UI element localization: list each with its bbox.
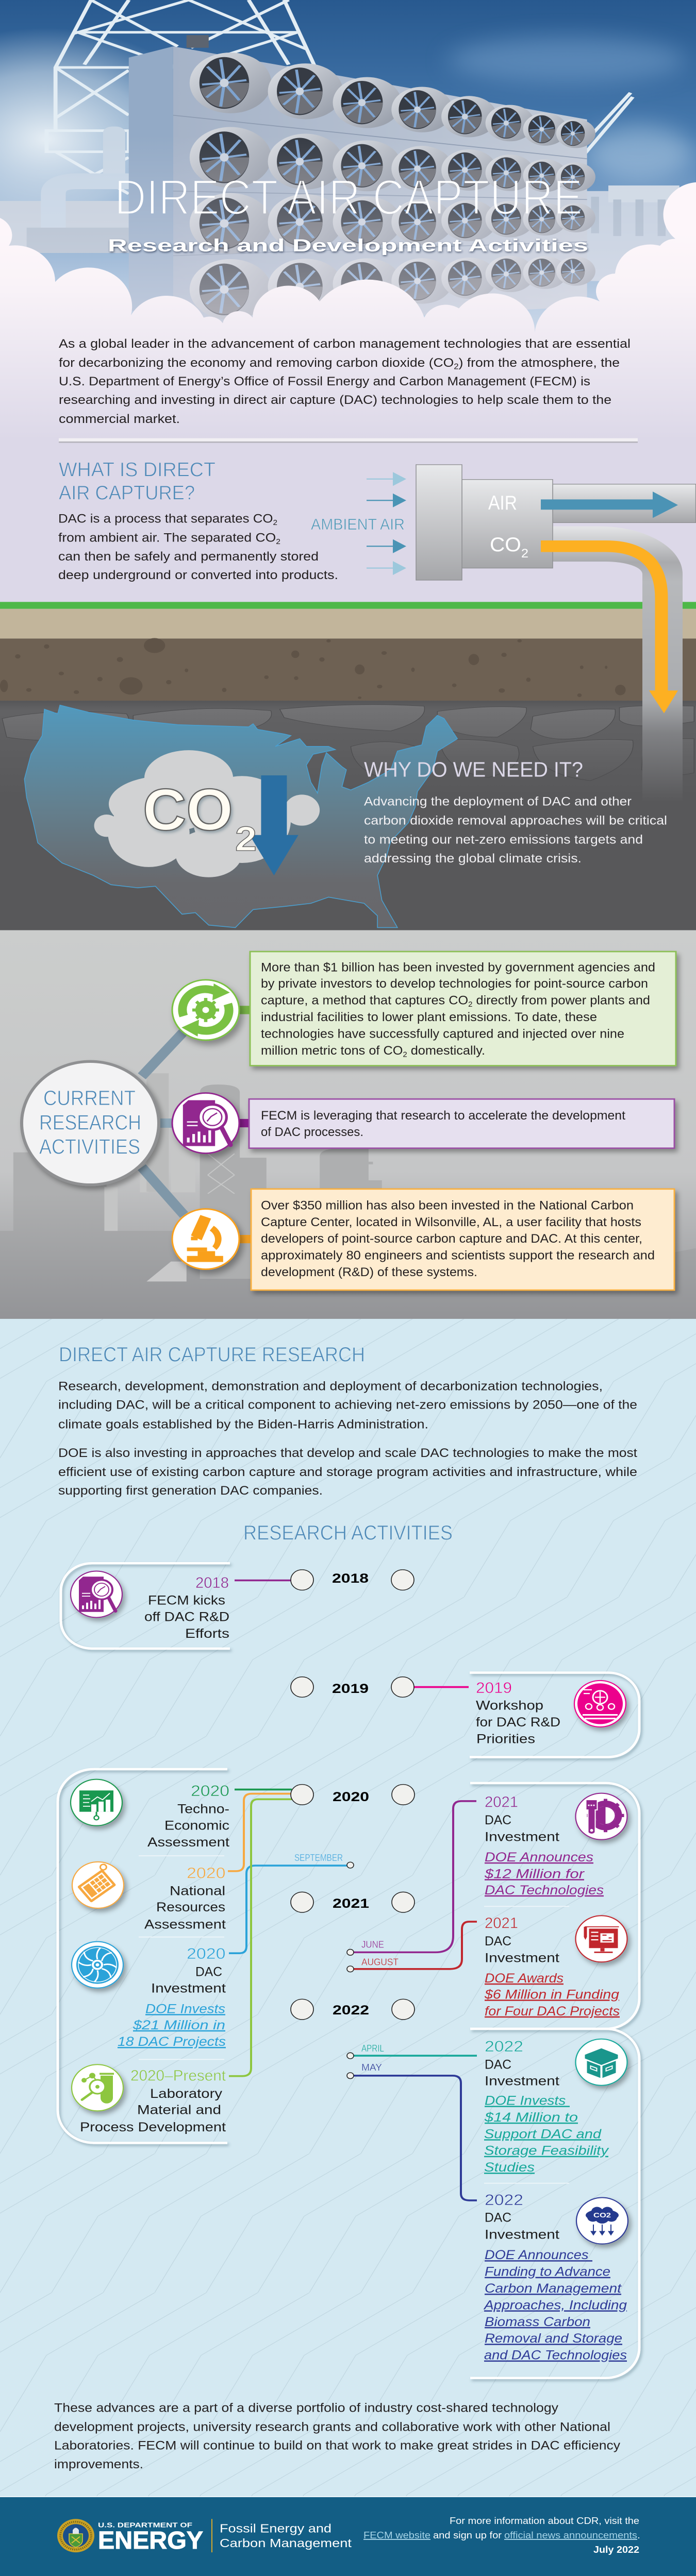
text: why do we need it: addressing the global climate crisis.: [364, 852, 582, 866]
entry: 2018 kick-off: FECM kicks: [148, 1593, 225, 1607]
month labels: MAY: [361, 2062, 382, 2073]
card: point-source capture: by private investors to develop technologies for point-source carbon: [261, 977, 648, 991]
card: point-source capture: 2: [403, 1050, 407, 1059]
card: FECM leveraging research: FECM is leveraging that research to accelerate the development: [261, 1109, 625, 1122]
text: what is direct air capture: from ambient air. The separated CO: [58, 531, 280, 545]
entry: 2022 DAC investment April: 2022: [485, 2038, 523, 2055]
month labels: SEPTEMBER: [294, 1853, 343, 1863]
entry: 2020 techno-economic: Assessment: [147, 1835, 230, 1850]
card: point-source capture: technologies have successfully captured and injected over nine: [261, 1027, 624, 1041]
timeline nodes and years: 2022: [333, 2003, 369, 2018]
icon: CO2 cloud: CO2: [593, 2212, 611, 2219]
entry: 2019 workshop: 2019: [476, 1680, 512, 1697]
entry: 2020 DAC investment: Investment: [151, 1981, 226, 1995]
footer note: official news announcements: [504, 2530, 637, 2541]
heading: why do we need it: WHY DO WE NEED IT?: [364, 758, 583, 782]
US map with CO2 cloud: CO: [143, 777, 233, 843]
card: point-source capture: More than $1 billion has been invested by government agencies and: [261, 961, 655, 974]
footer note: For more information about CDR, visit the: [450, 2516, 639, 2527]
hub circle: ACTIVITIES: [39, 1135, 140, 1159]
timeline nodes and years: 2019: [332, 1682, 369, 1696]
entry: 2020 national resources: 2020: [187, 1865, 225, 1882]
card: FECM leveraging research: [249, 1099, 674, 1148]
footer note: and sign up for: [433, 2530, 502, 2541]
entry: 2020 DAC investment: DAC: [195, 1964, 222, 1979]
DOE seal: [57, 2519, 94, 2552]
text: research intro: supporting first generation DAC companies.: [58, 1484, 323, 1498]
icon: microscope: [172, 1209, 239, 1269]
US map with CO2 cloud: 2: [235, 819, 257, 858]
timeline nodes and years: 2018: [332, 1571, 369, 1586]
entry: 2021 DAC investment August: $6 Million in Funding: [484, 1987, 619, 2002]
entry: 2020 DAC investment: DOE Invests: [145, 2002, 225, 2016]
month labels: APRIL: [361, 2043, 384, 2054]
entry: 2022 DAC investment May: Removal and Storage: [485, 2331, 622, 2346]
month labels: [294, 1853, 399, 2073]
text: research intro: Research, development, demonstration and deployment of decarbonization technologies,: [58, 1380, 603, 1393]
entry: 2022 DAC investment April: [484, 2038, 609, 2175]
page background: research section: [0, 1319, 696, 2497]
icon: report: [172, 1093, 239, 1154]
entry: 2022 DAC investment May: DAC: [485, 2210, 511, 2225]
entry: 2018 kick-off: [144, 1574, 229, 1641]
text: research intro: DOE is also investing in approaches that develop and scale DAC technologies to make the most: [58, 1446, 637, 1460]
entry: 2019 workshop: for DAC R&D: [476, 1715, 560, 1730]
arrow: air out: [541, 492, 678, 518]
entry: 2022 DAC investment May: Carbon Management: [485, 2281, 622, 2296]
entry: 2020 national resources: National: [170, 1884, 225, 1898]
timeline cards (white outlines): [58, 1563, 639, 2378]
footer: U.S. DEPARTMENT OF: [98, 2521, 192, 2529]
text: why do we need it: carbon dioxide removal approaches will be critical: [364, 814, 667, 827]
text: research intro: efficient use of existing carbon capture and storage program activities and infrastructure, while: [58, 1465, 637, 1479]
ground layers: [0, 602, 696, 930]
footer: Fossil Energy and: [220, 2522, 332, 2535]
heading: what is direct air capture: [59, 458, 216, 504]
hub circle: RESEARCH: [39, 1111, 141, 1134]
icon: lab analysis: [72, 2064, 123, 2111]
intro paragraph: researching and investing in direct air capture (DAC) technologies to help scale them to the: [59, 393, 611, 407]
month labels: AUGUST: [361, 1957, 399, 1968]
text: what is direct air capture: can then be safely and permanently stored: [58, 550, 319, 564]
entry: 2021 DAC investment August: 2021: [485, 1914, 518, 1931]
icon: report small: [71, 1571, 122, 1618]
entry: 2022 DAC investment April: DOE Invests: [485, 2093, 570, 2108]
text: what is direct air capture: DAC is a process that separates CO: [58, 512, 283, 526]
subtitle: Research and Development Activities: [108, 235, 588, 255]
entry: 2018 kick-off: Efforts: [185, 1626, 229, 1641]
text: research intro: including DAC, will be a critical component to achieving net-zero emissions by 2050—one of the: [58, 1398, 637, 1412]
entry: 2018 kick-off: 2018: [195, 1574, 229, 1591]
label: co2: CO: [490, 533, 523, 556]
text: why do we need it: to meeting our net-zero emissions targets and: [364, 833, 643, 846]
card: point-source capture: directly from power plants and: [473, 994, 650, 1007]
heading: research activities: RESEARCH ACTIVITIES: [243, 1521, 453, 1544]
entry: 2022 DAC investment May: 2022: [485, 2191, 523, 2209]
entry: 2020 national resources: [144, 1865, 226, 1931]
entry: 2022 DAC investment May: Approaches, Including: [483, 2298, 627, 2312]
entry: 2020 to present laboratory: Process Development: [80, 2120, 226, 2134]
heading: direct air capture research: DIRECT AIR CAPTURE RESEARCH: [59, 1343, 365, 1366]
entry: 2020 techno-economic: [147, 1783, 230, 1850]
card: point-source capture: million metric tons of CO: [261, 1044, 412, 1057]
label: co2: 2: [521, 547, 528, 561]
panel: current research activities: [0, 930, 696, 1319]
text: what is direct air capture: [58, 512, 338, 582]
heading: what is direct air capture: WHAT IS DIRECT: [59, 458, 216, 481]
footer: ENERGY: [98, 2526, 203, 2554]
text: why do we need it: [364, 795, 667, 866]
entry: 2022 DAC investment May: Biomass Carbon: [485, 2314, 590, 2329]
entry: 2021 DAC investment August: DOE Awards: [485, 1971, 564, 1986]
hero photo: direct air capture plant: [0, 0, 696, 338]
heading: what is direct air capture: AIR CAPTURE?: [59, 481, 195, 504]
entry: 2020 DAC investment: $21 Million in: [132, 2018, 225, 2032]
footer note: .: [637, 2530, 640, 2541]
card: national carbon capture center: Capture Center, located in Wilsonville, AL, a user facility that hosts: [261, 1215, 641, 1229]
entry: 2021 DAC investment June: $12 Million for: [484, 1867, 585, 1881]
icon: presentation chart: [71, 1780, 122, 1826]
entry: 2022 DAC investment May: [483, 2191, 627, 2362]
timeline nodes and years: 2021: [333, 1896, 369, 1911]
card: point-source capture: industrial facilities to lower plant emissions. To date, these: [261, 1010, 597, 1024]
entry: 2022 DAC investment April: Support DAC and: [484, 2127, 602, 2141]
entry: 2021 DAC investment August: Investment: [485, 1951, 560, 1965]
hub circle: [22, 1061, 159, 1185]
entry: 2022 DAC investment April: Storage Feasibility: [484, 2143, 609, 2158]
entry: 2022 DAC investment May: DOE Announces: [485, 2248, 592, 2262]
card: national carbon capture center: development (R&D) of these systems.: [261, 1265, 477, 1279]
timeline nodes and years: 2020: [333, 1789, 369, 1804]
entry: 2020 techno-economic: Techno-: [177, 1802, 229, 1816]
entry: 2022 DAC investment May: Funding to Advance: [485, 2264, 610, 2279]
card: point-source capture: [250, 952, 676, 1065]
intro paragraph: commercial market.: [59, 412, 180, 426]
ambient air arrows: [367, 472, 406, 575]
entry: 2021 DAC investment June: [484, 1793, 604, 1897]
closing paragraph: development projects, university research grants and collaborative work with other National: [54, 2420, 610, 2434]
text: what is direct air capture: 2: [273, 519, 277, 527]
label: ambient air: AMBIENT AIR: [311, 515, 405, 533]
entry: 2021 DAC investment June: Investment: [485, 1829, 560, 1844]
icon: turbine: [72, 1942, 123, 1988]
entry: 2019 workshop: Priorities: [476, 1732, 535, 1746]
entry: 2021 DAC investment June: DAC: [485, 1812, 511, 1827]
icon: workshop: [574, 1681, 626, 1727]
icon: storage box: [575, 2039, 627, 2086]
card: FECM leveraging research: of DAC processes.: [261, 1125, 363, 1139]
entry: 2020 to present laboratory: Laboratory: [150, 2086, 223, 2101]
title: DIRECT AIR CAPTURE: [114, 170, 583, 225]
closing paragraph: These advances are a part of a diverse portfolio of industry cost-shared technology: [54, 2401, 558, 2415]
closing paragraph: Laboratories. FECM will continue to build on that work to make great strides in DAC efficiency: [54, 2438, 620, 2452]
entry: 2021 DAC investment June: DAC Technologies: [485, 1883, 604, 1897]
entry: 2020 techno-economic: Economic: [164, 1818, 229, 1833]
entry: 2020 DAC investment: 18 DAC Projects: [118, 2034, 226, 2049]
entry: 2020 DAC investment: 2020: [187, 1945, 225, 1962]
entry: 2019 workshop: Workshop: [476, 1698, 543, 1713]
entry: 2019 workshop: [476, 1680, 560, 1746]
entry: 2020 DAC investment: [118, 1945, 226, 2049]
footer note: FECM website: [363, 2530, 430, 2541]
text: research intro: [58, 1380, 637, 1498]
timeline nodes and years: [291, 1570, 415, 2079]
icon: wrench and gear: [575, 1793, 627, 1840]
entry: 2021 DAC investment June: DOE Announces: [485, 1850, 593, 1865]
entry: 2020 to present laboratory: [80, 2067, 226, 2134]
entry: 2022 DAC investment April: DAC: [485, 2057, 511, 2072]
cloud band below the hero photo: [0, 182, 696, 440]
US map with CO2 cloud: [24, 705, 457, 927]
intro paragraph: ) from the atmosphere, the: [459, 356, 620, 370]
intro paragraph: As a global leader in the advancement of carbon management technologies that are essential: [59, 337, 631, 351]
entry: 2020 to present laboratory: 2020–Present: [130, 2067, 226, 2084]
entry: 2022 DAC investment April: Investment: [485, 2074, 560, 2088]
arrow: co2 down: [541, 546, 678, 713]
icon: flowchart monitor: [575, 1916, 627, 1962]
entry: 2021 DAC investment June: 2021: [485, 1793, 518, 1810]
intro paragraph: for decarbonizing the economy and removing carbon dioxide (CO: [59, 356, 461, 370]
card: national carbon capture center: [251, 1189, 674, 1290]
entry: 2022 DAC investment May: and DAC Technologies: [484, 2348, 627, 2362]
icon: CO2 cloud: [576, 2198, 628, 2244]
entry: 2021 DAC investment August: DAC: [485, 1934, 511, 1948]
card: point-source capture: 2: [468, 1001, 473, 1009]
card: point-source capture: capture, a method that captures CO: [261, 994, 482, 1007]
text: research intro: climate goals established by the Biden-Harris Administration.: [58, 1417, 428, 1431]
entry: 2020 national resources: Assessment: [144, 1917, 226, 1931]
text: what is direct air capture: deep underground or converted into products.: [58, 568, 338, 582]
intro paragraph: 2: [454, 362, 459, 371]
entry: 2021 DAC investment August: for Four DAC Projects: [485, 2004, 620, 2018]
closing paragraph: improvements.: [54, 2458, 143, 2471]
entry: 2022 DAC investment April: Studies: [484, 2160, 535, 2175]
DAC machine with air and CO2 pipes: [416, 465, 696, 805]
icon: gear cycle: [172, 980, 239, 1040]
text: why do we need it: Advancing the deployment of DAC and other: [364, 795, 632, 808]
card: national carbon capture center: approximately 80 engineers and scientists support the research and: [261, 1249, 655, 1262]
entry: 2022 DAC investment May: Investment: [485, 2227, 560, 2242]
text: what is direct air capture: 2: [276, 538, 280, 546]
footer: [0, 2496, 696, 2576]
label: air: AIR: [488, 492, 517, 514]
card separators: [139, 1856, 569, 2183]
card: point-source capture: domestically.: [407, 1044, 485, 1057]
hub circle: CURRENT: [43, 1087, 136, 1110]
entry: 2021 DAC investment August: [484, 1914, 620, 2018]
closing paragraph: [54, 2401, 620, 2471]
intro paragraph: [59, 337, 631, 426]
entry: 2020 to present laboratory: Material and: [137, 2103, 221, 2117]
entry: 2020 techno-economic: 2020: [191, 1783, 229, 1800]
month labels: JUNE: [361, 1939, 384, 1950]
intro paragraph: U.S. Department of Energy’s Office of Fossil Energy and Carbon Management (FECM) is: [59, 375, 590, 388]
footer note: [363, 2516, 640, 2555]
entry: 2022 DAC investment April: $14 Million to: [484, 2110, 578, 2125]
connectors: [142, 1010, 254, 1239]
factory silhouette: [0, 1073, 696, 1319]
card: national carbon capture center: developers of point-source carbon capture and DAC. At this center,: [261, 1232, 642, 1246]
icon: calculator clipboard: [72, 1862, 124, 1908]
footer: Carbon Management: [220, 2537, 352, 2550]
entry: 2020 national resources: Resources: [156, 1900, 225, 1914]
footer note: July 2022: [593, 2545, 639, 2555]
entry: 2018 kick-off: off DAC R&D: [144, 1609, 229, 1624]
timeline connector lines: [228, 1581, 477, 2200]
card: national carbon capture center: Over $350 million has also been invested in the National Carbon: [261, 1199, 634, 1212]
